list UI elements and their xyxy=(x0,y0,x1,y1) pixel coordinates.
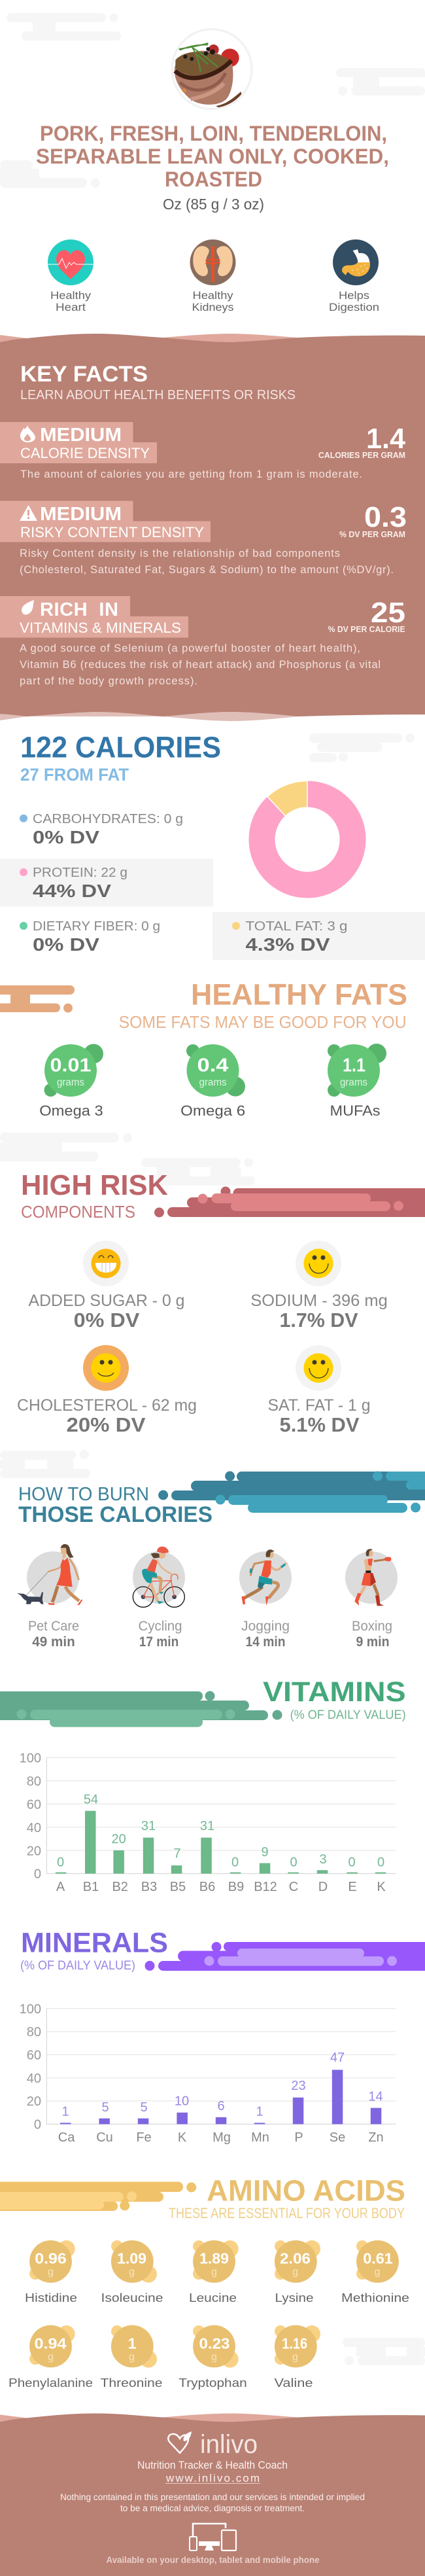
availability note: Available on your desktop, tablet and mobile phone xyxy=(106,2554,320,2565)
panel: amino acids xyxy=(0,2174,409,2390)
badge: mufas: 1.1 xyxy=(343,1055,366,1076)
bar chart: vitamins: B6 xyxy=(199,1880,215,1894)
macro: carbohydrates: 0% DV xyxy=(33,827,99,847)
macro: protein xyxy=(0,858,213,907)
fact: calorie density: CALORIE DENSITY xyxy=(20,445,150,461)
macro: dietary fiber: DIETARY FIBER: 0 g xyxy=(33,919,160,934)
bar chart: minerals: Zn xyxy=(368,2130,384,2145)
labels: activities: 49 min xyxy=(32,1634,75,1650)
bar chart: minerals: K xyxy=(178,2130,187,2145)
badge: omega 3: Omega 3 xyxy=(39,1103,103,1119)
panel: key facts xyxy=(0,334,425,721)
fact: risky content density: % DV PER GRAM xyxy=(339,530,405,539)
amino: methionine: 0.61 xyxy=(363,2250,393,2267)
panel: minerals xyxy=(20,1928,425,2145)
fact: calorie density: The amount of calories you are getting from 1 gram is moderate. xyxy=(20,468,362,480)
macro: carbohydrates xyxy=(20,812,183,847)
fact: rich in vitamins and minerals: A good source of Selenium (a powerful booster of heart health), xyxy=(20,643,360,654)
labels: activities: Cycling xyxy=(139,1619,182,1634)
label: healthy kidneys: Kidneys xyxy=(192,301,234,313)
bar chart: minerals: Se xyxy=(330,2130,345,2145)
labels: activities: 9 min xyxy=(356,1634,390,1650)
bar chart: minerals: 23 xyxy=(291,2079,306,2093)
bar chart: vitamins: B2 xyxy=(112,1880,128,1894)
bar chart: vitamins: D xyxy=(318,1880,328,1894)
fact: calorie density: CALORIES PER GRAM xyxy=(318,451,405,460)
labels: activities: Boxing xyxy=(352,1619,392,1634)
macro: total fat: TOTAL FAT: 3 g xyxy=(246,919,348,934)
bar chart: minerals: 1 xyxy=(61,2105,69,2119)
amino: histidine xyxy=(25,2240,77,2304)
subheading: vitamins: (% OF DAILY VALUE) xyxy=(290,1708,406,1722)
amino: tryptophan xyxy=(178,2325,247,2390)
bar chart: minerals: P xyxy=(294,2130,303,2145)
panel: vitamins xyxy=(0,1676,406,1894)
subheading: components: COMPONENTS xyxy=(21,1202,135,1222)
item: saturated fat: SAT. FAT - 1 g xyxy=(268,1396,370,1415)
bar chart: vitamins: B1 xyxy=(83,1880,99,1894)
label: healthy kidneys xyxy=(192,289,234,313)
bar chart: minerals: 0 xyxy=(34,2117,41,2132)
bar chart: vitamins: 31 xyxy=(141,1819,156,1833)
subheading: key facts: LEARN ABOUT HEALTH BENEFITS OR RISKS xyxy=(20,388,296,402)
subheading: minerals: (% OF DAILY VALUE) xyxy=(20,1958,135,1973)
bar chart: vitamins: 40 xyxy=(27,1821,41,1835)
icon: helps digestion xyxy=(333,239,379,285)
item: saturated fat xyxy=(268,1345,370,1436)
amino: methionine: g xyxy=(375,2267,380,2278)
item: added sugar: 0% DV xyxy=(74,1309,140,1332)
badge: omega 6: 0.4 xyxy=(197,1055,229,1076)
amino: lysine: g xyxy=(292,2267,298,2278)
heading: key facts: KEY FACTS xyxy=(20,362,148,387)
label: healthy kidneys: Healthy xyxy=(192,289,233,302)
bar chart: minerals: 60 xyxy=(27,2048,41,2062)
badge: mufas: MUFAs xyxy=(330,1103,381,1119)
title xyxy=(36,122,389,191)
icon: healthy kidneys xyxy=(190,239,235,285)
disclaimer: Nothing contained in this presentation and our services is intended or implied xyxy=(60,2492,365,2502)
bar chart: vitamins: B12 xyxy=(254,1880,277,1894)
bar chart: minerals: Ca xyxy=(58,2130,75,2145)
bar chart: vitamins: 54 xyxy=(84,1793,98,1807)
label: helps digestion: Helps xyxy=(339,289,369,302)
bar chart: vitamins: 60 xyxy=(27,1798,41,1812)
macro: dietary fiber xyxy=(20,919,160,955)
amino: leucine: Leucine xyxy=(189,2291,237,2304)
bar chart: vitamins: 80 xyxy=(27,1774,41,1789)
amino: valine: Valine xyxy=(275,2376,313,2390)
bar chart: vitamins: 31 xyxy=(200,1819,214,1833)
amino: isoleucine: Isoleucine xyxy=(101,2291,163,2304)
bar chart: vitamins: C xyxy=(289,1880,298,1894)
amino: valine: 1.16 xyxy=(282,2335,307,2352)
subheading: from fat: 27 FROM FAT xyxy=(20,765,129,785)
bar chart: minerals: 100 xyxy=(20,2002,41,2017)
bar chart: vitamins: 3 xyxy=(319,1852,327,1867)
bar chart: minerals: 14 xyxy=(368,2090,383,2104)
title: PORK, FRESH, LOIN, TENDERLOIN, xyxy=(40,122,387,145)
bar chart: minerals: 20 xyxy=(27,2094,41,2109)
bar chart: minerals: Fe xyxy=(136,2130,152,2145)
amino: histidine: g xyxy=(48,2267,54,2278)
item: sodium xyxy=(250,1241,388,1332)
tagline: Nutrition Tracker & Health Coach xyxy=(137,2459,288,2471)
amino: threonine xyxy=(101,2325,162,2390)
bar chart: minerals: Cu xyxy=(96,2130,113,2145)
panel: how to burn those calories xyxy=(17,1471,425,1650)
amino: leucine xyxy=(189,2240,239,2304)
amino: histidine: Histidine xyxy=(25,2291,77,2304)
bar chart: vitamins: B5 xyxy=(170,1880,186,1894)
amino: leucine: g xyxy=(211,2267,217,2278)
subheading: healthy fats: SOME FATS MAY BE GOOD FOR YOU xyxy=(119,1012,407,1032)
fact: rich in vitamins and minerals: VITAMINS & MINERALS xyxy=(20,620,181,636)
panel: footer xyxy=(0,2413,425,2576)
title: SEPARABLE LEAN ONLY, COOKED, xyxy=(36,145,389,168)
decorative blob: minerals xyxy=(145,1942,425,1971)
label: helps digestion: Digestion xyxy=(329,301,379,313)
disclaimer xyxy=(60,2492,365,2513)
heading: amino acids: AMINO ACIDS xyxy=(207,2174,405,2208)
item: saturated fat: 5.1% DV xyxy=(280,1413,360,1436)
item: cholesterol: CHOLESTEROL - 62 mg xyxy=(17,1396,197,1415)
bar chart: minerals: 47 xyxy=(330,2051,345,2065)
amino: threonine: g xyxy=(129,2352,135,2363)
panel: calories xyxy=(0,730,425,960)
badge: omega 6 xyxy=(180,1044,245,1119)
bar chart: vitamins xyxy=(20,1751,396,1894)
bar chart: vitamins: 7 xyxy=(173,1846,181,1861)
icon: healthy heart xyxy=(48,239,94,285)
amino: phenylalanine: g xyxy=(48,2352,54,2363)
fact: rich in vitamins and minerals: 25 xyxy=(371,597,405,629)
fact: rich in vitamins and minerals: Vitamin B6 (reduces the risk of heart attack) and Phosphorus (a vital xyxy=(20,659,381,671)
heading: calories: 122 CALORIES xyxy=(20,730,221,764)
badge: omega 3: grams xyxy=(57,1077,84,1088)
bar chart: minerals: 1 xyxy=(256,2105,264,2119)
logo: inlivo: inlivo xyxy=(200,2430,258,2459)
bar chart: minerals: Mn xyxy=(251,2130,269,2145)
item: sodium: SODIUM - 396 mg xyxy=(250,1292,388,1310)
bar chart: vitamins: 0 xyxy=(290,1856,298,1870)
heading: vitamins: VITAMINS xyxy=(263,1676,406,1708)
amino: valine xyxy=(275,2325,320,2390)
label: healthy heart: Heart xyxy=(56,301,86,313)
decorative blob: vitamins xyxy=(0,1691,282,1727)
heading: those calories: THOSE CALORIES xyxy=(18,1502,212,1527)
bar chart: vitamins: E xyxy=(348,1880,357,1894)
fact: risky content density: RISKY CONTENT DENSITY xyxy=(20,524,204,540)
heading: how to burn: HOW TO BURN xyxy=(18,1484,149,1505)
amino: isoleucine: g xyxy=(129,2267,135,2278)
badge: mufas: grams xyxy=(340,1077,367,1088)
fact: risky content density: (Cholesterol, Saturated Fat, Sugars & Sodium) to the amount (%DV/gr). xyxy=(20,564,394,576)
amino: tryptophan: 0.23 xyxy=(199,2335,230,2352)
decorative blob: amino acids xyxy=(0,2181,196,2211)
amino: tryptophan: Tryptophan xyxy=(178,2376,247,2390)
badge: omega 3 xyxy=(39,1044,103,1119)
fact: calorie density: MEDIUM xyxy=(40,425,122,446)
icon: devices xyxy=(190,2524,236,2550)
label: healthy heart xyxy=(50,289,92,313)
fact: calorie density: 1.4 xyxy=(366,423,406,455)
fact: calorie density xyxy=(0,422,406,480)
bar chart: minerals: 10 xyxy=(175,2094,189,2109)
amino: valine: g xyxy=(292,2352,298,2363)
bar chart: vitamins: B3 xyxy=(141,1880,157,1894)
bar chart: minerals: 40 xyxy=(27,2072,41,2086)
decorative blob: healthy fats xyxy=(0,985,75,1013)
fact: risky content density: 0.3 xyxy=(364,501,407,533)
activity: jogging xyxy=(239,1549,292,1606)
amino: methionine xyxy=(341,2240,409,2304)
amino: histidine: 0.96 xyxy=(35,2250,67,2267)
fact: rich in vitamins and minerals: % DV PER CALORIE xyxy=(328,625,405,634)
macro: total fat xyxy=(212,912,425,960)
amino: phenylalanine: Phenylalanine xyxy=(8,2376,93,2390)
heading: high risk: HIGH RISK xyxy=(21,1170,169,1201)
bar chart: minerals: Mg xyxy=(212,2130,231,2145)
fact: risky content density xyxy=(0,501,407,576)
label: helps digestion xyxy=(329,289,379,313)
heading: healthy fats: HEALTHY FATS xyxy=(191,978,407,1012)
badge: omega 6: Omega 6 xyxy=(180,1103,245,1119)
bar chart: vitamins: K xyxy=(377,1880,386,1894)
bar chart: vitamins: 0 xyxy=(231,1856,239,1870)
title: ROASTED xyxy=(165,168,262,191)
label: healthy heart: Healthy xyxy=(50,289,92,302)
decorative blob: burn calories xyxy=(158,1471,425,1513)
amino: lysine: 2.06 xyxy=(280,2250,311,2267)
bar chart: vitamins: 0 xyxy=(348,1856,356,1870)
bar chart: vitamins: 0 xyxy=(57,1856,64,1870)
labels: activities: 17 min xyxy=(139,1634,178,1650)
heading: minerals: MINERALS xyxy=(21,1928,168,1959)
amino: leucine: 1.89 xyxy=(199,2250,229,2267)
bar chart: vitamins: 0 xyxy=(377,1856,384,1870)
amino: phenylalanine: 0.94 xyxy=(34,2335,67,2352)
activity: pet care xyxy=(17,1544,82,1605)
fact: risky content density: Risky Content density is the relationship of bad components xyxy=(20,548,340,559)
amino: tryptophan: g xyxy=(211,2352,217,2363)
item: sodium: 1.7% DV xyxy=(280,1309,358,1332)
item: added sugar xyxy=(29,1241,184,1332)
bar chart: vitamins: 20 xyxy=(27,1844,41,1858)
amino: methionine: Methionine xyxy=(341,2291,409,2304)
activity: boxing xyxy=(345,1549,398,1606)
logo: inlivo xyxy=(168,2430,258,2459)
bar chart: vitamins: 0 xyxy=(34,1867,41,1882)
amino: lysine: Lysine xyxy=(275,2291,314,2304)
labels: activities xyxy=(28,1619,392,1650)
website link: www.inlivo.com xyxy=(165,2472,260,2484)
badge: omega 6: grams xyxy=(199,1077,227,1088)
serving size: Oz (85 g / 3 oz) xyxy=(163,196,264,213)
item: cholesterol: 20% DV xyxy=(67,1413,146,1436)
amino: phenylalanine xyxy=(8,2325,93,2390)
bar chart: vitamins: A xyxy=(56,1880,65,1894)
amino: threonine: Threonine xyxy=(101,2376,162,2390)
donut chart xyxy=(262,781,353,885)
labels: activities: Jogging xyxy=(241,1619,290,1634)
item: cholesterol xyxy=(17,1345,197,1436)
fact: rich in vitamins and minerals: RICH IN xyxy=(40,599,118,620)
amino: threonine: 1 xyxy=(128,2335,137,2352)
labels: activities: Pet Care xyxy=(28,1619,79,1634)
bar chart: minerals: 80 xyxy=(27,2025,41,2039)
amino: isoleucine xyxy=(101,2240,163,2304)
fact: rich in vitamins and minerals: part of the body growth process). xyxy=(20,675,197,687)
badge: omega 3: 0.01 xyxy=(50,1055,92,1076)
bar chart: vitamins: B9 xyxy=(228,1880,244,1894)
item: added sugar: ADDED SUGAR - 0 g xyxy=(29,1292,184,1310)
bar chart: minerals: 5 xyxy=(101,2100,109,2115)
macro: protein: PROTEIN: 22 g xyxy=(33,866,128,880)
bar chart: minerals xyxy=(20,2002,396,2145)
food photo circle xyxy=(172,29,252,109)
fact: risky content density: MEDIUM xyxy=(40,504,122,525)
bar chart: vitamins: 9 xyxy=(261,1845,269,1860)
labels: activities: 14 min xyxy=(246,1634,285,1650)
macro: dietary fiber: 0% DV xyxy=(33,934,99,955)
activity: cycling xyxy=(133,1547,185,1607)
bar chart: minerals: 5 xyxy=(140,2100,148,2115)
badge: mufas xyxy=(328,1044,386,1119)
panel: healthy fats xyxy=(0,978,407,1119)
decorative blob: high risk xyxy=(154,1187,425,1217)
macro: protein: 44% DV xyxy=(33,881,111,901)
fact: rich in vitamins and minerals xyxy=(0,596,405,687)
macro: carbohydrates: CARBOHYDRATES: 0 g xyxy=(33,812,183,826)
bar chart: vitamins: 20 xyxy=(111,1832,126,1846)
amino: isoleucine: 1.09 xyxy=(117,2250,146,2267)
bar chart: minerals: 6 xyxy=(217,2099,225,2113)
panel: high risk components xyxy=(17,1170,425,1436)
macro: total fat: 4.3% DV xyxy=(246,934,330,955)
bar chart: vitamins: 100 xyxy=(20,1751,41,1765)
amino: lysine xyxy=(275,2240,320,2304)
disclaimer: to be a medical advice, diagnosis or treatment. xyxy=(120,2503,305,2513)
